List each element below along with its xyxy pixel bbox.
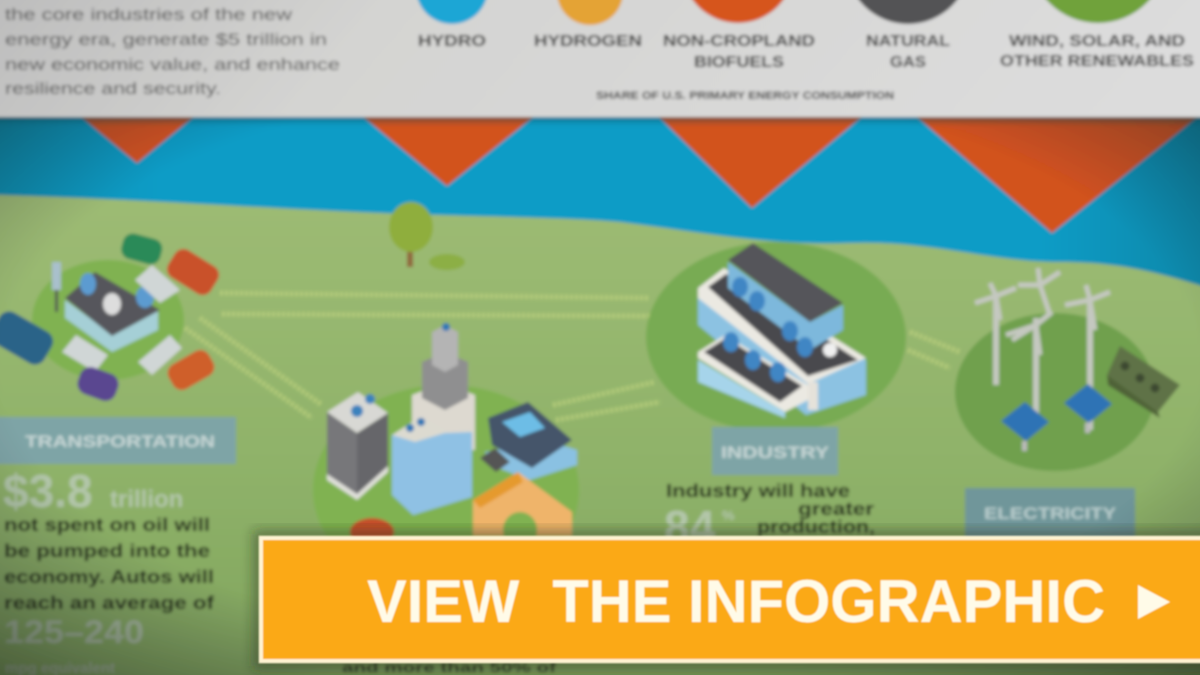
- industry heading: INDUSTRY: [721, 443, 830, 462]
- transportation text block: [3, 465, 215, 675]
- energy source labels: OTHER RENEWABLES: [1000, 53, 1194, 70]
- icon: orange building: [473, 472, 572, 548]
- energy connection lines: [185, 293, 960, 420]
- industry text block: greater: [798, 499, 874, 519]
- energy source labels: BIOFUELS: [694, 54, 784, 71]
- blue water band: [0, 100, 1200, 310]
- chart caption: SHARE OF U.S. PRIMARY ENERGY CONSUMPTION: [596, 90, 894, 102]
- lower tier: [698, 335, 808, 412]
- transportation text block: be pumped into the: [4, 541, 210, 561]
- intro text: new economic value, and enhance: [5, 55, 340, 74]
- icon: play arrow: [1138, 585, 1170, 619]
- intro text: energy era, generate $5 trillion in: [5, 30, 327, 49]
- call to action button: [253, 530, 1200, 670]
- icon: red car: [350, 518, 394, 546]
- intro text: resilience and security.: [5, 79, 221, 98]
- transportation text block: trillion: [110, 486, 183, 513]
- top panel shadow: [0, 112, 1200, 122]
- city cluster: [313, 323, 579, 595]
- icon: battery block: [1107, 346, 1180, 418]
- green land: [0, 194, 1200, 675]
- transportation text block: 125–240: [4, 614, 144, 650]
- electricity heading: [965, 488, 1135, 538]
- intro text: the core industries of the new: [5, 5, 293, 24]
- transportation heading: [0, 417, 236, 464]
- icon: white skyscraper: [412, 323, 475, 450]
- icon: factory: [698, 243, 866, 418]
- icon: cars: [0, 231, 223, 404]
- electricity heading: ELECTRICITY: [984, 504, 1117, 523]
- transportation text block: economy. Autos will: [4, 567, 214, 587]
- industry text block: [342, 481, 875, 675]
- energy source labels: GAS: [890, 54, 926, 71]
- industry text block: production,: [757, 517, 875, 537]
- energy source labels: NATURAL: [866, 33, 950, 50]
- icon: wind turbines: [975, 268, 1110, 430]
- call to action button: VIEW THE INFOGRAPHIC: [367, 568, 1105, 635]
- industry text block: %: [722, 507, 735, 523]
- transportation heading: TRANSPORTATION: [25, 432, 215, 451]
- industry text block: 84: [664, 501, 716, 553]
- orange triangles: [73, 110, 1200, 233]
- icon: charging building: [52, 262, 182, 375]
- second tier: [698, 270, 866, 415]
- icon: solar panels: [1001, 384, 1112, 451]
- transportation text block: reach an average of: [4, 593, 215, 613]
- transportation text block: $3.8: [3, 465, 93, 517]
- intro text: [5, 5, 340, 98]
- transportation cluster: [0, 231, 223, 404]
- top panel: [0, 0, 1200, 117]
- upper block: [728, 262, 843, 350]
- industry heading: [712, 427, 838, 475]
- icon: blue tower: [392, 417, 472, 515]
- energy source labels: HYDRO: [418, 33, 486, 50]
- energy source circles: [416, 0, 1167, 25]
- energy source labels: HYDROGEN: [534, 33, 642, 50]
- icon: tree: [389, 202, 465, 270]
- energy source labels: [418, 33, 1194, 71]
- energy source labels: NON-CROPLAND: [663, 33, 815, 50]
- industry text block: Industry will have: [666, 481, 850, 501]
- icon: gray tower: [327, 392, 388, 500]
- energy source labels: WIND, SOLAR, AND: [1009, 33, 1185, 50]
- icon: campus building: [480, 402, 577, 480]
- transportation text block: not spent on oil will: [4, 515, 210, 535]
- industry text block: and more than 50% of: [342, 659, 556, 675]
- industry cluster: [646, 242, 906, 432]
- electricity cluster: [955, 268, 1180, 471]
